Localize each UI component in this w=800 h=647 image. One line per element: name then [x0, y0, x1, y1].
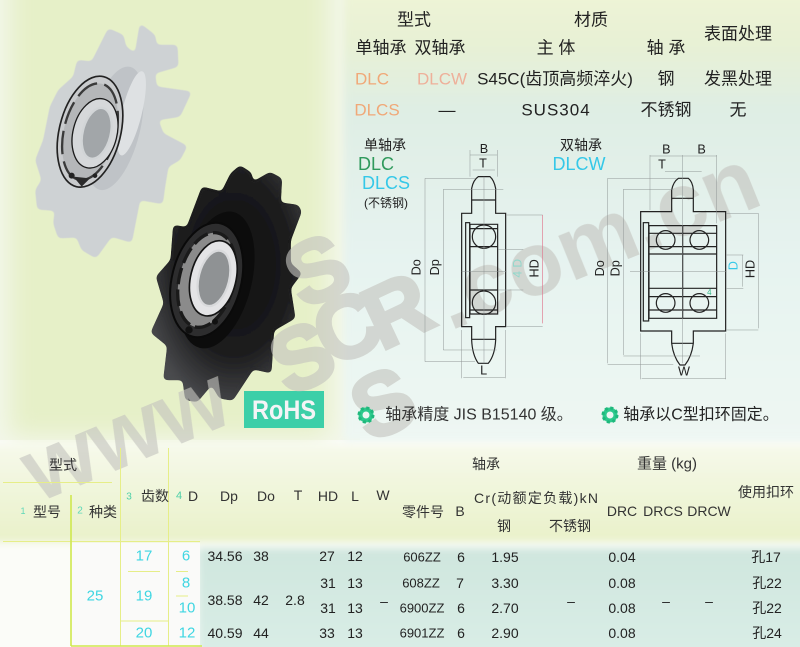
dimensions table: row 6901ZZ: 6	[457, 625, 465, 641]
diagram: double bearing section: Dp	[609, 260, 623, 276]
dimensions table: row 6900ZZ: 13	[347, 600, 363, 616]
table heading row: 单轴承	[356, 38, 406, 58]
icon: green gear	[359, 408, 373, 422]
dimensions table header: 轴承	[472, 456, 500, 472]
dimensions table: row 606ZZ	[207, 548, 781, 565]
watermark: S	[254, 300, 350, 414]
table heading row: 主 体	[537, 38, 575, 58]
dimensions table header	[20, 456, 794, 534]
dimensions table: row 6901ZZ: 40.59	[207, 625, 243, 641]
row: DLC and DLCW: DLC	[355, 70, 389, 88]
dimensions table: row 608ZZ: 孔22	[752, 575, 782, 591]
dimensions table: cyan type columns: 20	[136, 624, 152, 642]
dimensions table header: 2	[77, 506, 83, 516]
dimensions table: row 6900ZZ: 0.08	[608, 600, 636, 616]
dimensions table header: Do	[257, 488, 275, 504]
double bearing model labels	[552, 137, 606, 174]
dimensions table: row 606ZZ: 6	[457, 549, 465, 565]
dimensions table: row 6900ZZ: 6900ZZ	[400, 600, 444, 616]
dimensions table: merged cells: –	[705, 593, 713, 609]
dimensions table header: 钢	[497, 518, 511, 534]
dimensions table header: Cr(动额定负载)kN	[474, 490, 598, 506]
row: DLC and DLCW: 钢	[658, 70, 674, 88]
dimensions table header: 4	[176, 490, 182, 502]
dimensions table: merged cells: 2.8	[285, 592, 305, 608]
note: C-type retaining ring: 轴承以C型扣环固定。	[623, 406, 779, 424]
row: DLCS	[354, 100, 746, 120]
diagram: single bearing section	[410, 142, 543, 378]
dimensions table header: Dp	[220, 488, 238, 504]
diagram: double bearing section: B	[697, 142, 706, 156]
dimensions table: merged cells: –	[567, 593, 575, 609]
product photo: black sprocket	[151, 165, 302, 402]
table heading row: 表面处理	[704, 24, 772, 44]
watermark: www	[6, 345, 244, 522]
row: DLC and DLCW	[355, 70, 772, 88]
dimensions table: row 606ZZ: 27	[319, 548, 335, 564]
table heading row	[356, 10, 772, 58]
dimensions table: cyan type columns	[87, 548, 195, 642]
dimensions table header: 型式	[49, 457, 77, 473]
dimensions table: row 606ZZ: 606ZZ	[403, 550, 441, 564]
dimensions table: row 606ZZ: 12	[347, 548, 363, 564]
dimensions table header: DRCS	[643, 503, 683, 519]
note: bearing accuracy: 轴承精度 JIS B15140 级。	[385, 406, 573, 424]
dimensions table: row 6901ZZ: 13	[347, 625, 363, 641]
dimensions table header: 3	[126, 492, 132, 502]
dimensions table: row 6901ZZ	[207, 625, 782, 641]
diagram: double bearing section: 4	[707, 288, 712, 297]
product photo: silver sprocket	[35, 23, 192, 258]
diagram: double bearing section	[593, 142, 758, 379]
specification table: type, material and finish	[354, 10, 772, 120]
row: DLCS: 不锈钢	[640, 100, 692, 120]
dimensions table: row 6900ZZ: 孔22	[752, 600, 782, 616]
double bearing model labels: 双轴承	[560, 137, 602, 153]
dimensions table: cyan type columns: 17	[136, 548, 152, 564]
watermark: S	[335, 346, 431, 460]
dimensions table: row 6900ZZ: 2.70	[491, 600, 519, 616]
watermark	[6, 129, 773, 522]
double bearing model labels: DLCW	[552, 154, 606, 174]
dimensions table: cyan type columns: 25	[87, 588, 103, 604]
dimensions table: row 6901ZZ: 33	[319, 625, 335, 641]
dimensions table header: 1	[20, 506, 26, 516]
watermark: .com.cn	[420, 129, 773, 350]
row: DLC and DLCW: DLCW	[417, 70, 467, 88]
diagram: single bearing section: Do	[410, 259, 424, 275]
diagram: single bearing section: 4 D	[511, 259, 525, 278]
watermark: C	[297, 269, 397, 385]
dimensions table: row 608ZZ: 608ZZ	[402, 576, 440, 590]
dimensions table header: D	[188, 488, 198, 504]
dimensions table: row 606ZZ: 0.04	[608, 549, 636, 565]
dimensions table: cyan type columns: 8	[182, 574, 190, 592]
dimensions table header: DRCW	[687, 503, 732, 519]
table heading row: 材质	[574, 10, 608, 30]
dimensions table: row 606ZZ: 38	[253, 548, 269, 564]
row: DLCS: 无	[730, 100, 746, 120]
diagram: double bearing section: W	[678, 365, 690, 379]
dimensions table header: 型号	[33, 504, 61, 520]
row: DLCS: DLCS	[354, 100, 400, 120]
dimensions table: row 6901ZZ: 6901ZZ	[400, 626, 444, 640]
row: DLCS: SUS304	[521, 100, 591, 120]
diagram: double bearing section: B	[662, 142, 671, 156]
dimensions table: row 606ZZ: 1.95	[491, 549, 519, 565]
diagram: double bearing section: Do	[593, 260, 607, 276]
dimensions table: row 608ZZ: 7	[456, 575, 464, 591]
dimensions table: merged cells: 38.58	[207, 592, 243, 608]
icon: green gear	[603, 408, 617, 422]
dimensions table: row 6900ZZ: 6	[457, 600, 465, 616]
row: DLCS: —	[438, 100, 456, 120]
dimensions table header: 使用扣环	[738, 484, 794, 500]
dimensions table header: DRC	[607, 503, 637, 519]
watermark: R	[347, 252, 447, 368]
RoHS badge: RoHS	[252, 395, 316, 425]
dimensions table: row 608ZZ: 31	[320, 575, 336, 591]
dimensions table header: W	[376, 487, 390, 503]
dimensions table: row 6901ZZ: 孔24	[752, 625, 782, 641]
dimensions table: merged cells: 42	[253, 592, 269, 608]
row: DLC and DLCW: 发黑处理	[704, 70, 772, 88]
diagram: single bearing section: B	[480, 142, 488, 156]
table heading row: 双轴承	[414, 38, 466, 58]
dimensions table: merged cells: –	[662, 593, 670, 609]
dimensions table: row 606ZZ: 34.56	[207, 548, 243, 564]
diagram: single bearing section: T	[479, 156, 487, 170]
diagram: single bearing section: HD	[527, 259, 541, 277]
row: DLC and DLCW: S45C(齿顶高频淬火)	[477, 70, 633, 88]
dimensions table: row 6900ZZ: 31	[320, 600, 336, 616]
diagram: single bearing section: Dp	[428, 259, 442, 275]
dimensions table header: 不锈钢	[549, 518, 591, 534]
single bearing model labels: DLCS	[362, 173, 410, 193]
dimensions table header: T	[294, 487, 303, 503]
dimensions table: cyan type columns: 12	[179, 624, 195, 642]
single bearing model labels: DLC	[358, 154, 394, 174]
dimensions table: row 6901ZZ: 44	[253, 625, 269, 641]
dimensions table header: 零件号	[402, 504, 444, 520]
diagram: double bearing section: HD	[744, 260, 758, 278]
diagram: single bearing section: L	[480, 364, 487, 378]
dimensions table: row 608ZZ: 3.30	[491, 575, 519, 591]
dimensions table: cyan type columns: 6	[182, 548, 190, 564]
table heading row: 轴 承	[647, 38, 685, 58]
diagram: double bearing section: D	[726, 261, 740, 270]
dimensions table: row 6901ZZ: 2.90	[491, 625, 519, 641]
dimensions table: row 6901ZZ: 0.08	[608, 625, 636, 641]
dimensions table: merged cells: –	[380, 593, 388, 609]
dimensions table header: 重量 (kg)	[637, 456, 697, 472]
dimensions table: row 6900ZZ	[320, 600, 782, 616]
dimensions table: row 608ZZ	[320, 575, 782, 591]
single bearing model labels: 单轴承	[364, 137, 406, 153]
single bearing model labels	[358, 137, 410, 210]
dimensions table header: HD	[318, 488, 338, 504]
watermark: S	[269, 213, 365, 327]
dimensions table header: B	[455, 503, 465, 519]
dimensions table: row 608ZZ: 13	[347, 575, 363, 591]
table heading row: 型式	[397, 10, 431, 30]
dimensions table: cyan type columns: 10	[179, 600, 195, 616]
dimensions table: row 608ZZ: 0.08	[608, 575, 636, 591]
dimensions table header: 齿数	[141, 488, 169, 504]
single bearing model labels: (不锈钢)	[364, 196, 408, 210]
dimensions table: cyan type columns: 19	[136, 588, 152, 604]
diagram: double bearing section: T	[658, 157, 666, 171]
dimensions table header: 种类	[89, 504, 117, 520]
dimensions table: merged cells	[207, 592, 713, 609]
dimensions table: row 606ZZ: 孔17	[751, 549, 781, 565]
dimensions table header: L	[351, 488, 359, 504]
